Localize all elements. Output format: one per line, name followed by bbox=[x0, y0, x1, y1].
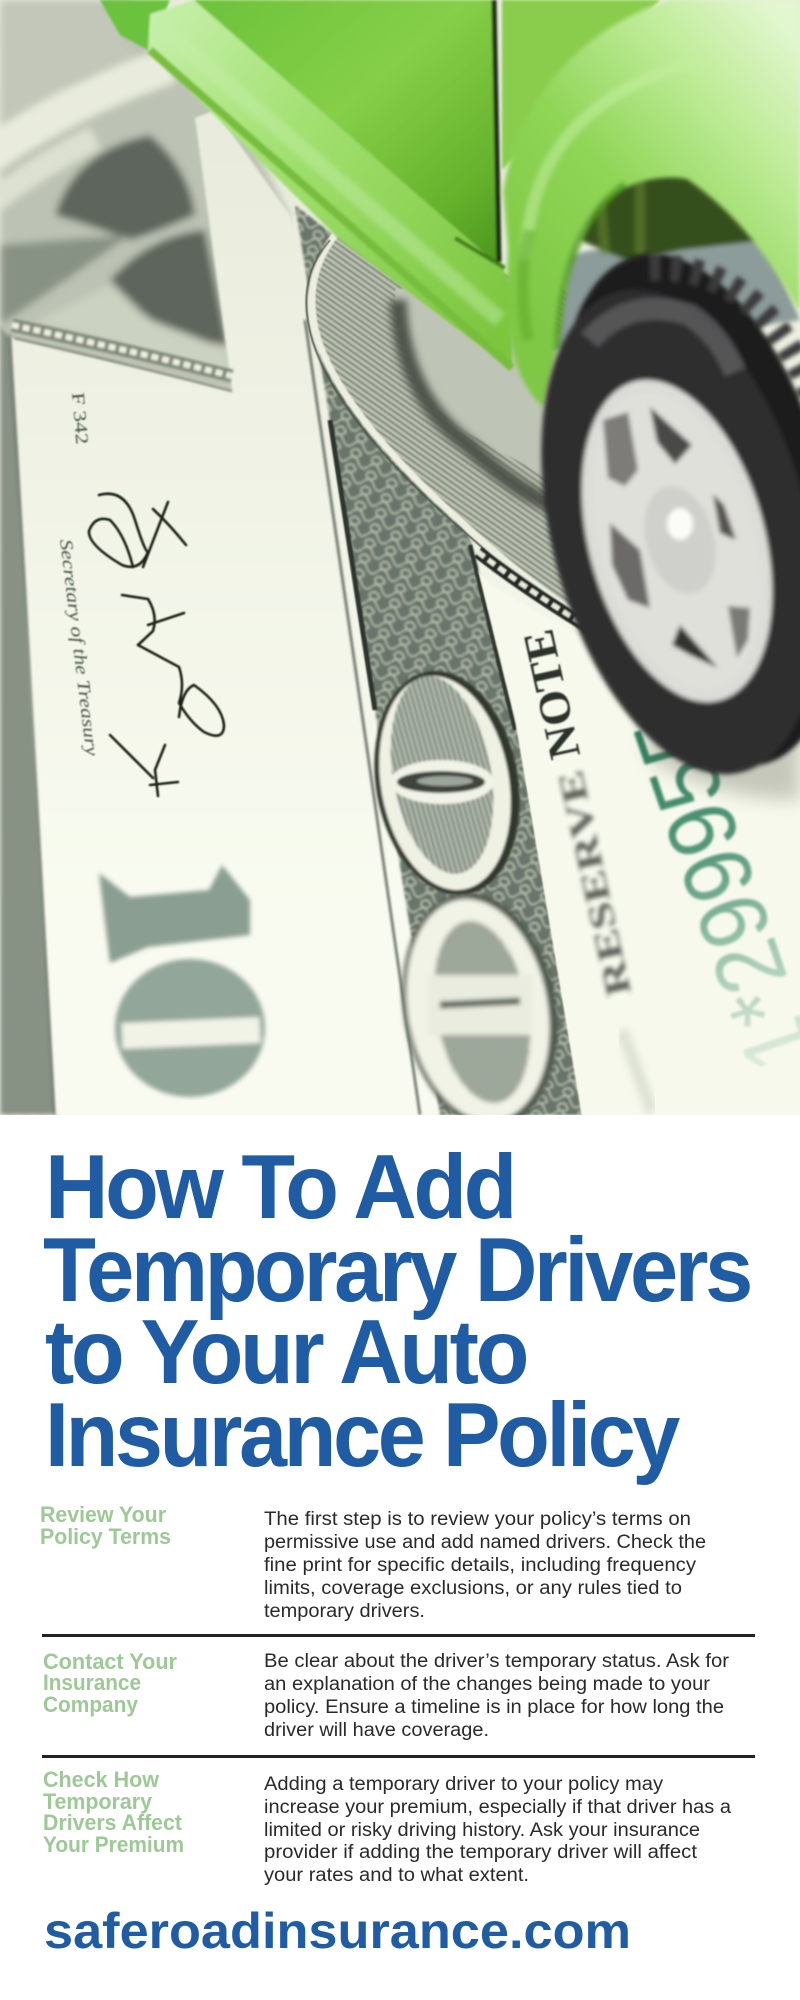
section 3 heading: Temporary bbox=[43, 1789, 153, 1814]
title: to Your Auto bbox=[45, 1302, 527, 1403]
section 2 text bbox=[264, 1651, 730, 1741]
section 2 heading: Company bbox=[43, 1692, 139, 1717]
website footer: saferoadinsurance.com bbox=[44, 1903, 631, 1959]
banknote portrait engraving, upper left bbox=[0, 0, 290, 395]
section 3 heading: Your Premium bbox=[43, 1832, 184, 1857]
front wheel bbox=[538, 251, 800, 778]
left engraved edge of bill bbox=[0, 325, 58, 1115]
printed note text: NOTE bbox=[514, 625, 590, 763]
section 2 heading: Insurance bbox=[43, 1670, 141, 1695]
small printed text on the bill: Secretary of the Treasury bbox=[56, 538, 102, 757]
photo: toy car on dollar bills bbox=[0, 0, 800, 1139]
seal with portrait bbox=[306, 235, 600, 636]
section 1 text bbox=[264, 1509, 706, 1622]
oval numeral zero, upper bbox=[372, 669, 522, 896]
section 3 text: your rates and to what extent. bbox=[264, 1865, 529, 1886]
wheel well bbox=[558, 174, 800, 348]
engraved green band with lace pattern bbox=[295, 205, 582, 1115]
wheel rim with spokes bbox=[577, 376, 777, 706]
section 2 text: driver will have coverage. bbox=[264, 1720, 489, 1741]
section 2 text: policy. Ensure a timeline is in place for how long the bbox=[264, 1697, 724, 1718]
section 1 heading: Review Your bbox=[40, 1502, 166, 1527]
section 1 text: fine print for specific details, including frequency bbox=[264, 1555, 697, 1576]
section 1 heading: Policy Terms bbox=[40, 1524, 171, 1549]
section 3 heading: Check How bbox=[43, 1767, 160, 1792]
title: How To Add bbox=[45, 1137, 514, 1238]
section 3 text: provider if adding the temporary driver will affect bbox=[264, 1842, 698, 1863]
title bbox=[43, 1137, 750, 1486]
section 3 text: increase your premium, especially if that driver has a bbox=[264, 1797, 731, 1818]
section 1 text: temporary drivers. bbox=[264, 1601, 425, 1622]
decorative dotted border band bbox=[12, 325, 232, 391]
printed note text bbox=[523, 628, 634, 999]
oval numeral zero, lower bbox=[398, 892, 560, 1115]
title: Insurance Policy bbox=[45, 1385, 681, 1486]
small printed text on the bill bbox=[59, 392, 96, 756]
section 1 text: limits, coverage exclusions, or any rules tied to bbox=[264, 1578, 682, 1599]
title: Temporary Drivers bbox=[43, 1220, 750, 1321]
small printed text on the bill: F 342 bbox=[68, 392, 92, 445]
car body bbox=[100, 0, 660, 370]
section 1 text: The first step is to review your policy’s terms on bbox=[264, 1509, 691, 1530]
shadow under the car bbox=[642, 732, 800, 808]
section 3 heading bbox=[43, 1767, 184, 1857]
section 2 text: Be clear about the driver’s temporary status. Ask for bbox=[264, 1651, 730, 1672]
section 3 text bbox=[264, 1774, 731, 1886]
tire tread bbox=[572, 251, 800, 768]
section 2 heading: Contact Your bbox=[43, 1649, 177, 1674]
signature bbox=[89, 494, 224, 796]
large blurred numeral 10 bbox=[99, 865, 265, 1097]
section 3 heading: Drivers Affect bbox=[43, 1810, 183, 1835]
front fender bbox=[503, 0, 800, 407]
tire sidewall bbox=[538, 289, 800, 778]
section 1 text: permissive use and add named drivers. Check the bbox=[264, 1532, 706, 1553]
right banknote cream area bbox=[477, 570, 584, 1115]
printed note text: RESERVE bbox=[550, 767, 639, 1000]
section 1 heading bbox=[40, 1502, 171, 1549]
section 2 heading bbox=[43, 1649, 177, 1717]
cream margin strip with signature area bbox=[10, 112, 291, 1115]
section 3 text: Adding a temporary driver to your policy may bbox=[264, 1774, 664, 1795]
section 2 text: an explanation of the changes being made to your bbox=[264, 1674, 711, 1695]
section 3 text: limited or risky driving history. Ask your insurance bbox=[264, 1820, 700, 1841]
